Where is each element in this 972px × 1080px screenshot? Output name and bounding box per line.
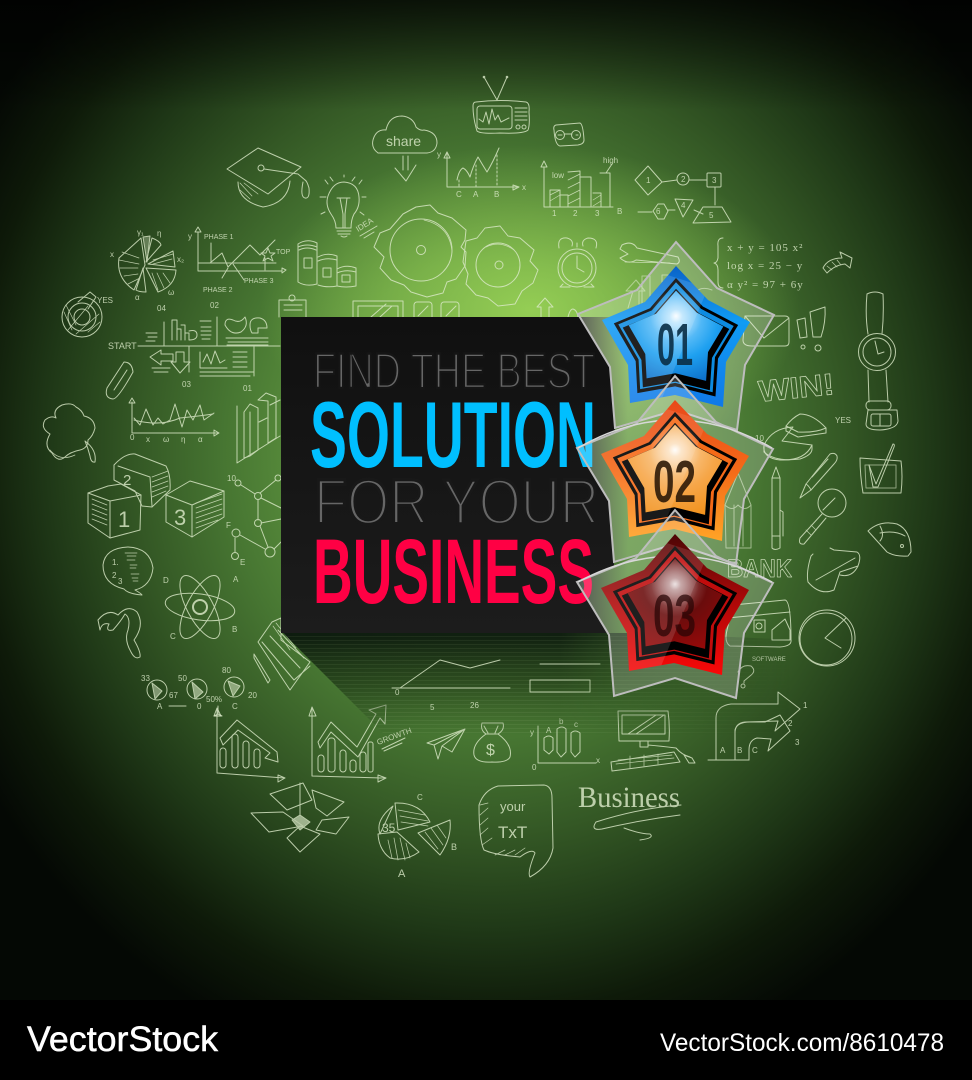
icon: flow diagram: 3 [712,176,717,185]
icon: small gear [463,226,538,306]
icon: text speech bubble [479,785,553,877]
panel shadow: 0 [395,688,400,697]
icon: atom: D [163,576,169,585]
icon: spiral arrow [62,292,113,337]
icon: wall clock [799,610,855,666]
icon: money bag [474,723,510,762]
black title panel [281,317,628,635]
icon: corner arrows: B [737,746,742,755]
icon: thick pencil [725,473,751,548]
icon: growth chart [309,705,413,782]
icon: checkbox [860,444,902,493]
icon: corner arrows [708,692,808,760]
icon: vertical pencil [772,467,783,550]
icon: network graph [226,474,281,584]
icon: paper airplane [427,729,465,759]
doodles: right column [708,292,911,760]
icon: pie chart: γ₁ [137,228,144,237]
icon: bar chart: high [603,156,618,165]
icon: phases chart: TOP [276,249,291,256]
icon: small upward arrows [537,298,578,317]
icon: cylinder bars chart: b [559,717,564,726]
icon: pie chart 35: C [417,793,423,802]
icon: numbered cubes: 3 [174,505,186,530]
icon: waveform chart: 0 [130,433,135,442]
icon: diagonal pencil [800,453,837,498]
icon: wrist watch [858,292,898,430]
heading line: BUSINESS: BUSINESS [313,521,594,623]
icon: corner arrows: 3 [795,738,800,747]
icon: flow diagram: 1 [646,176,651,185]
icon: 3D pie: 10 [755,434,764,443]
icon: pie chart 35: B [451,842,457,852]
doodles: bottom rows [214,705,695,880]
BANK text: BANK [727,555,792,583]
mini pie charts row: 67 [169,691,178,700]
icon: bar chart: 3 [595,209,600,218]
icon: clipboard [279,295,306,317]
icon: text speech bubble: your [500,799,526,814]
icon: process timeline: 04 [157,304,166,313]
icon: pie chart: η [157,229,161,238]
icon: exclamation marks [797,307,825,351]
icon: speech bubble list [103,547,153,595]
icon: curly arrow [823,252,852,273]
math formulas: x + y = 105 x² [727,242,803,254]
icon: number three shape [98,609,140,658]
icon: line chart with y axis [437,148,526,199]
icon: cylinder bars chart: A [546,726,552,735]
icon: process timeline [108,301,280,393]
icon: waveform chart: α [198,435,203,444]
WIN sign: WIN! [757,368,836,409]
icon: process timeline: 01 [243,384,252,393]
icon: share cloud: share [386,133,421,149]
icon: pie chart [110,228,184,302]
icon: numbered cubes: 1 [118,507,130,532]
star badge 02: 02 [653,449,696,515]
icon: cylinder bars chart [530,717,600,772]
star badge 01 [578,242,774,430]
icon: cylinder bars chart: 0 [532,763,537,772]
icon: pie chart 35 [378,793,457,880]
icon: 3D bar chart [237,393,280,463]
icon: wrench [620,243,679,264]
software question mark: SOFTWARE [752,657,786,663]
icon: coin stacks [298,241,356,287]
icon: arrows behind star [626,275,712,310]
icon: text speech bubble: TxT [498,823,527,842]
icon: bar chart: low [552,171,564,180]
icon: waveform chart: ω [163,435,169,444]
icon: decline chart [214,708,285,782]
icon: thought cloud [43,404,95,462]
icon: corner arrows: C [752,746,758,755]
icon: pie chart: ω [168,288,174,297]
icon: open box [251,783,349,852]
icon: large gear [374,205,466,297]
icon: flow diagram: 6 [656,207,661,216]
icon: cylinder bars chart: c [574,720,578,729]
image id: VectorStock.com/8610478 [660,1029,944,1057]
icon: line chart with y axis: x [522,183,526,192]
heading line: FOR YOUR: FOR YOUR [314,466,599,538]
icon: process timeline: 02 [210,301,219,310]
panel shadow: 5 [430,703,435,712]
icon: atom [163,570,237,644]
icon: line chart with y axis: C [456,190,462,199]
star badge 02 [577,376,773,564]
mini pie charts row: C [232,702,238,711]
star badge 03 [577,510,773,698]
heading line: SOLUTION: SOLUTION [310,382,596,487]
icon: glasses [807,548,860,592]
icon: waveform chart: x [146,435,150,444]
icon: briefcase [726,600,791,647]
icon: atom: C [170,632,176,641]
icon: computer mouse [868,523,911,556]
icon: phases chart [188,227,291,294]
icon: desktop computer [611,711,695,771]
mini pie charts row: A [157,702,163,711]
icon: process timeline: START [108,341,137,351]
icon: flow diagram: 2 [681,175,686,184]
VectorStock wordmark: VectorStock [27,1020,219,1059]
icon: cylinder bars chart: y [530,728,534,737]
mini pie charts row: 0 [197,702,202,711]
doodles: top row [62,76,852,393]
icon: network graph: E [240,558,245,567]
panel shadow [283,633,800,735]
icon: waveform chart [129,398,219,444]
icon: waveform chart: η [181,435,185,444]
panel shadow: 26 [470,701,479,710]
icon: money bag: $ [486,742,495,759]
icon: television [473,76,529,133]
icon: phases chart: y [188,232,192,241]
icon: cylinder bars chart: x [596,756,600,765]
heading line: FIND THE BEST: FIND THE BEST [313,343,595,399]
icon: share cloud [373,116,437,181]
icon: paper clip [106,362,133,399]
software question mark [738,657,786,688]
icon: network graph: 10 [227,474,236,483]
icon: phases chart: PHASE 1 [204,234,234,241]
math formulas: log x = 25 − y [727,260,803,272]
icon: small cassette [554,123,584,146]
doodles: left column [43,362,310,716]
icon: pie chart: α [135,293,140,302]
icon: pie chart 35: A [398,868,406,880]
mini pie charts row: 20 [248,691,257,700]
icon: line chart with y axis: B [494,190,499,199]
icon: corner arrows: 2 [788,719,793,728]
icon: growth chart: GROWTH [376,726,413,747]
icon: 3D pie: YES [835,416,851,425]
icon: alarm clock [558,238,597,287]
star badge 03: 03 [653,583,696,649]
mini pie charts row: 80 [222,666,231,675]
icon: network graph: A [233,575,239,584]
icon: corner arrows: 1 [803,701,808,710]
Business handwritten word [578,781,681,840]
icon: atom: B [232,625,237,634]
mini pie charts row: 50% [206,695,222,704]
icon: numbered cubes: 2 [123,472,131,489]
icon: line chart with y axis: A [473,190,479,199]
star badge 01: 01 [657,312,693,378]
mini pie charts row: 50 [178,674,187,683]
icon: flow diagram: 4 [681,201,686,210]
icon: pie chart: x [110,250,114,259]
icon: phases chart: PHASE 2 [203,287,233,294]
math formulas: α y² = 97 + 6y [727,279,804,291]
icon: speech bubble list: 3 [118,577,123,586]
icon: phases chart: PHASE 3 [244,278,274,285]
icon: flow diagram [635,166,731,223]
icon: light bulb [320,175,377,238]
icon: envelope [743,316,789,346]
icon: light bulb: IDEA [354,216,375,234]
icon: pie chart 35: 35 [382,821,396,835]
icon: bar chart: 2 [573,209,578,218]
icon: 3D pie [755,414,851,460]
icon: network graph: F [226,521,231,530]
icon: process timeline: 03 [182,380,191,389]
icon: pie chart: x₂ [177,255,184,264]
icon: flow diagram: 5 [709,211,714,220]
mini pie charts row: 33 [141,674,150,683]
math formulas [714,238,804,291]
icon: magnifier [800,489,846,544]
icon: bar chart [541,156,622,218]
icon: open book [254,618,310,690]
icon: speech bubble list: 1. [112,558,119,567]
icon: corner arrows: A [720,746,726,755]
icon: tablet and phones [353,301,459,336]
icon: spiral arrow: YES [97,296,113,305]
icon: speech bubble list: 2 [112,571,117,580]
footer bar [0,1000,972,1080]
mini pie charts row [141,666,257,716]
icon: bar chart: B [617,207,622,216]
icon: graduation cap [227,148,309,207]
Business handwritten word: Business [578,781,680,814]
icon: bar chart: 1 [552,209,557,218]
icon: line chart with y axis: y [437,150,441,159]
icon: numbered cubes [88,454,224,538]
